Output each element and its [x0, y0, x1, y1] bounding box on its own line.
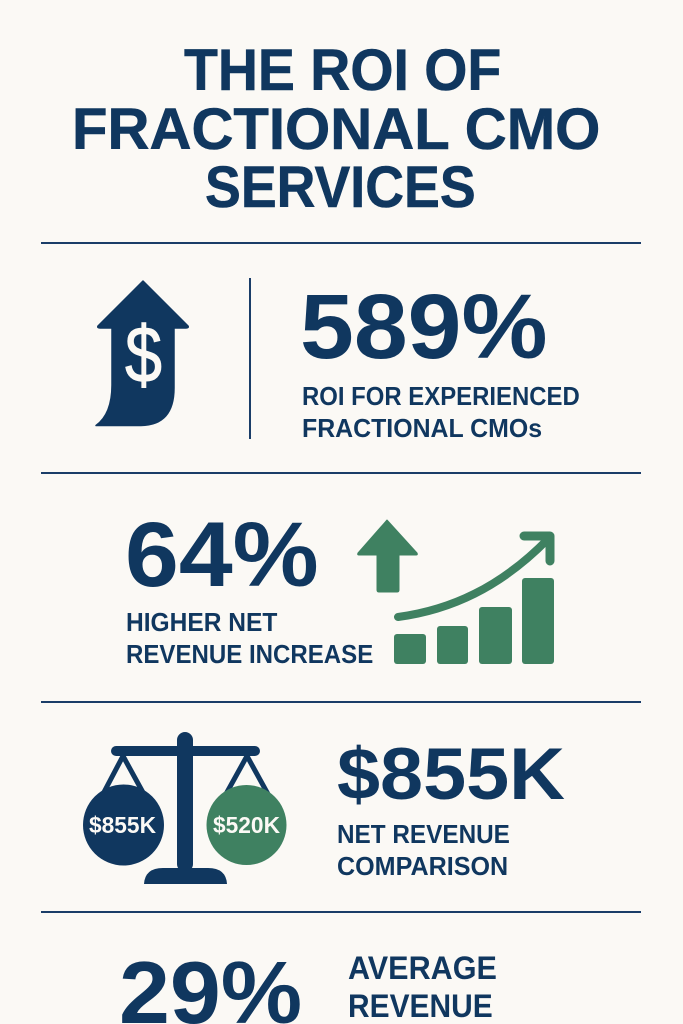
title: FRACTIONAL CMO — [72, 97, 600, 162]
caption: net revenue — [126, 607, 373, 669]
panel: $855K comparison — [83, 732, 565, 884]
caption: ROI: ROI FOR EXPERIENCED — [302, 380, 580, 410]
caption: ROI — [302, 380, 580, 442]
stat: 589%: 589% — [300, 276, 548, 378]
icon: balance scale — [83, 732, 286, 884]
caption: comparison: NET REVENUE — [337, 819, 510, 849]
icon: balance scale: $855K — [89, 812, 156, 838]
title — [72, 38, 600, 220]
stat: $855K: $855K — [336, 734, 565, 815]
stat: 64%: 64% — [125, 504, 319, 606]
caption: average revenue: REVENUE — [348, 988, 493, 1024]
caption: average revenue: AVERAGE — [348, 950, 497, 986]
caption: comparison — [337, 819, 510, 881]
caption: net revenue: HIGHER NET — [126, 607, 277, 637]
panel: 29% average revenue — [119, 945, 497, 1024]
caption: ROI: FRACTIONAL CMOs — [302, 412, 542, 442]
divider line — [249, 278, 251, 439]
caption: comparison: COMPARISON — [337, 851, 508, 881]
icon: balance scale: $520K — [213, 812, 280, 838]
caption: net revenue: REVENUE INCREASE — [126, 639, 373, 669]
title: THE ROI OF — [184, 38, 501, 103]
icon: growth chart — [357, 520, 554, 664]
title: SERVICES — [205, 155, 476, 220]
caption: average revenue — [348, 950, 497, 1024]
panel: 589% ROI — [95, 276, 580, 442]
icon: dollar arrow — [95, 280, 189, 426]
panel: 64% revenue — [125, 504, 554, 669]
icon: dollar arrow: $ — [125, 310, 162, 399]
